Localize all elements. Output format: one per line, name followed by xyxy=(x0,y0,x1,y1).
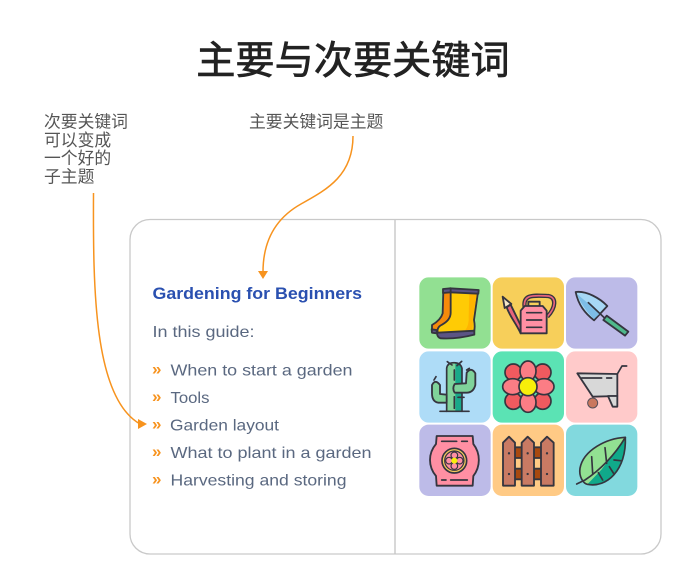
list: guide contents: » xyxy=(152,470,161,488)
list: guide contents: Harvesting and storing xyxy=(170,472,346,490)
panel: guide card xyxy=(130,220,661,554)
annotation: secondary keywords: 一个好的 xyxy=(44,149,111,168)
icon: watering can xyxy=(493,277,564,349)
icon: fence xyxy=(493,425,564,496)
icon: seed bag xyxy=(419,425,491,496)
icon: cactus xyxy=(419,351,491,423)
list: guide contents: Tools xyxy=(170,390,210,407)
annotation: secondary keywords: 子主题 xyxy=(44,168,95,186)
icon: trowel xyxy=(566,277,637,349)
list: guide contents: » xyxy=(152,360,161,378)
icon: flower xyxy=(493,351,564,423)
title: 主要与次要关键词 xyxy=(196,40,510,83)
list: guide contents: » xyxy=(152,387,161,406)
icon: wheelbarrow xyxy=(566,351,637,423)
list: guide contents: » xyxy=(152,414,161,434)
list: guide contents: When to start a garden xyxy=(170,362,352,380)
text: intro: In this guide: xyxy=(152,324,254,341)
icon grid: gardening icons xyxy=(419,277,637,496)
arrow: primary keyword to heading xyxy=(258,136,353,279)
list: guide contents: » xyxy=(152,442,161,461)
icon: leaf xyxy=(566,425,637,496)
arrow: secondary keyword to list item xyxy=(93,193,147,429)
list: guide contents: Garden layout xyxy=(170,418,280,434)
annotation: secondary keywords: 次要关键词 xyxy=(44,112,128,132)
heading: guide title: Gardening for Beginners xyxy=(152,285,362,303)
icon: boots xyxy=(419,277,491,349)
list: guide contents xyxy=(152,360,372,490)
list: guide contents: What to plant in a garden xyxy=(170,445,372,462)
annotation: primary keyword: 主要关键词是主题 xyxy=(249,112,383,132)
annotation: secondary keywords: 可以变成 xyxy=(44,131,111,150)
